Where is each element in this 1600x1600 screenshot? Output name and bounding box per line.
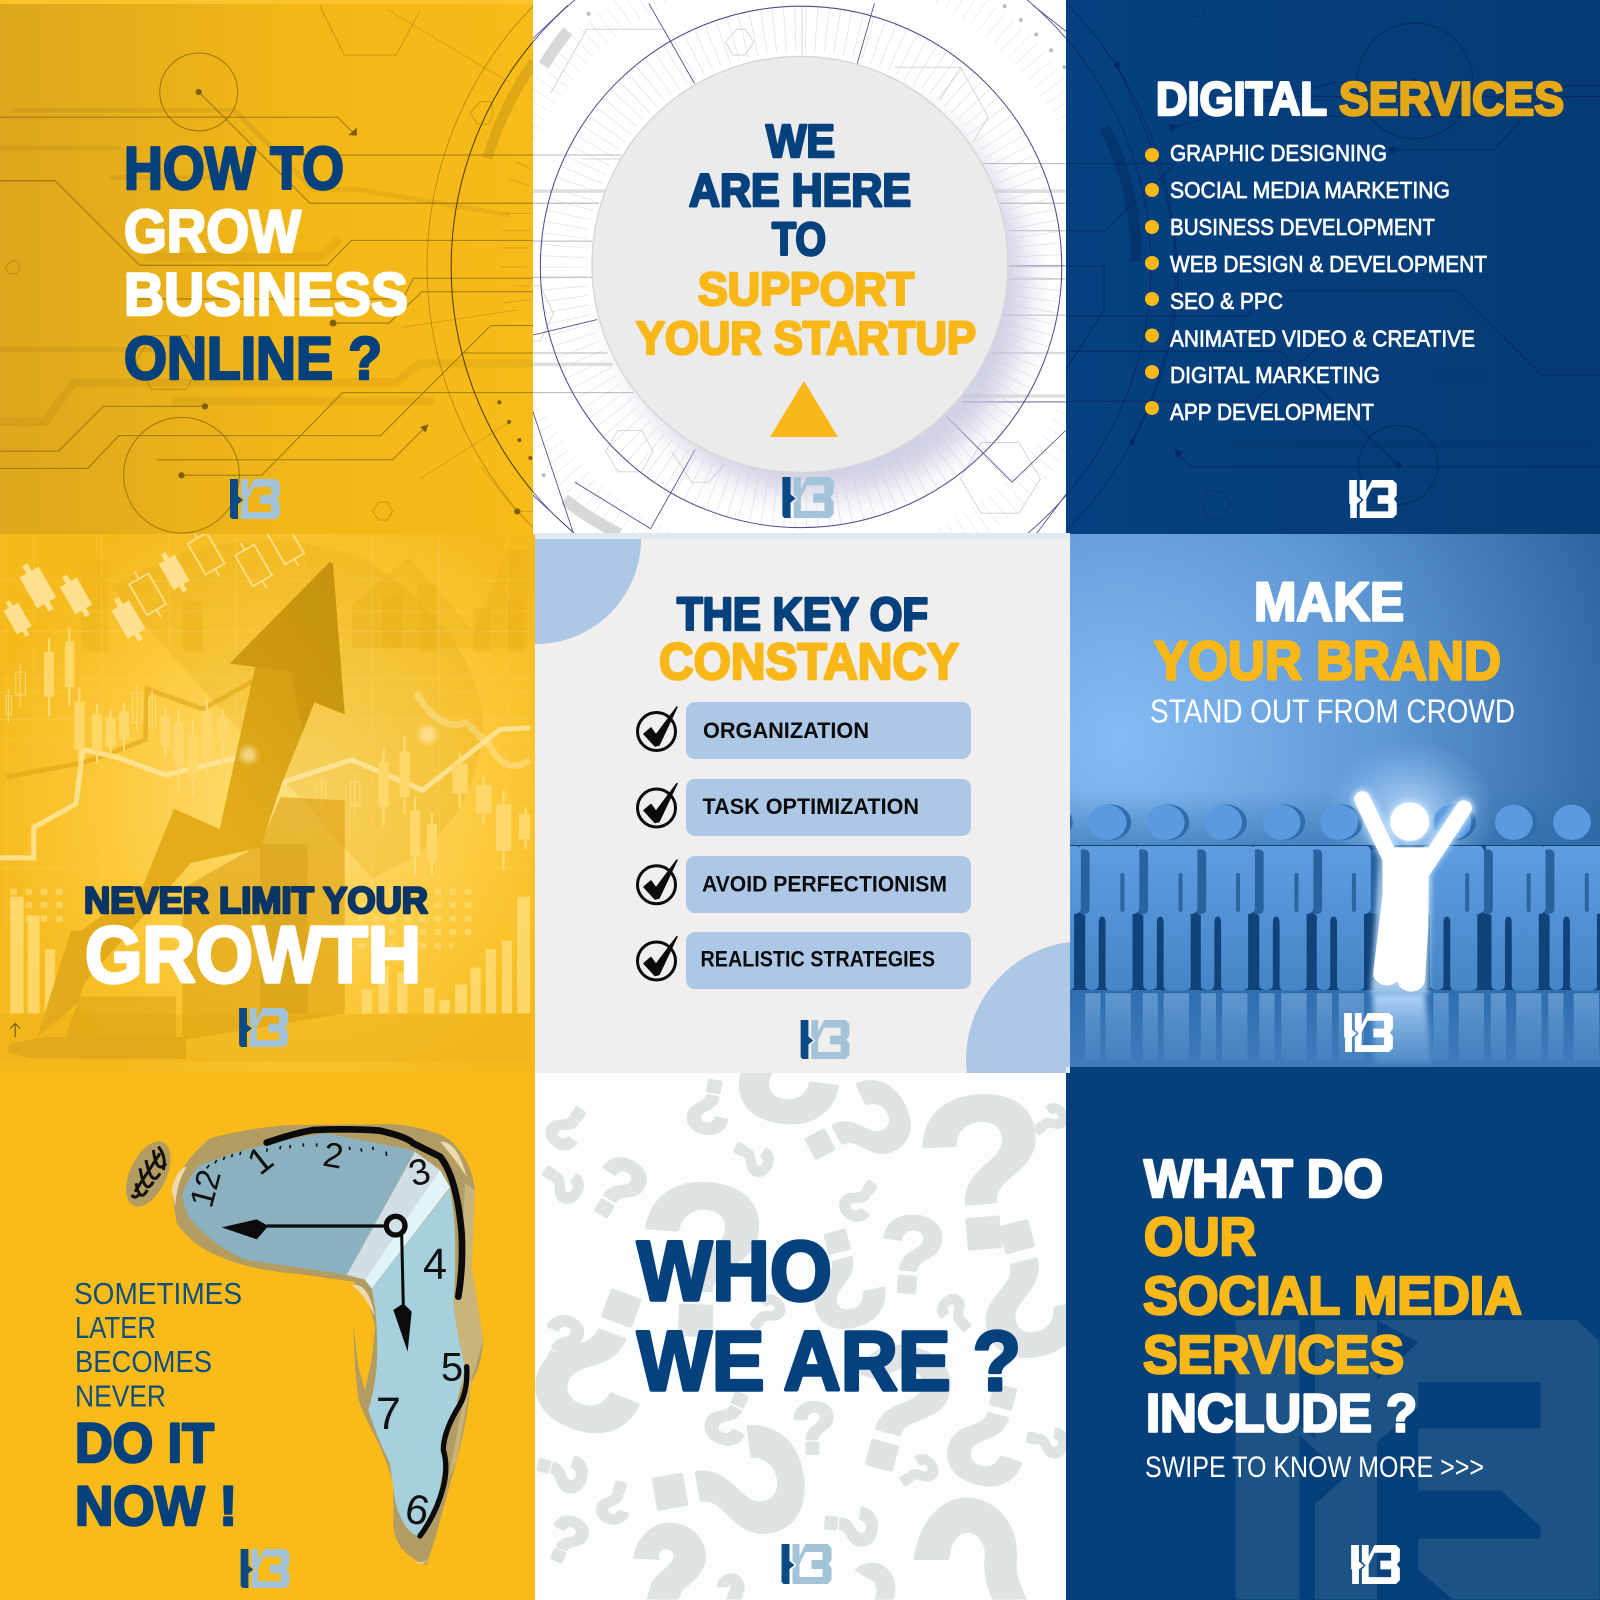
clock hands [222, 1216, 412, 1352]
checklist item: organization [638, 702, 971, 759]
clock numerals: 3 [404, 1150, 435, 1194]
heading: who we are: WHO [637, 1224, 832, 1318]
panel: what do our social media services include [1066, 1067, 1600, 1600]
heading: digital services: SERVICES [1339, 72, 1564, 125]
decoration: top-left quarter circle [535, 539, 641, 644]
bullet list: services: APP DEVELOPMENT [1170, 399, 1374, 425]
heading: we are here to support your startup: TO [772, 213, 826, 265]
watermark logo [1236, 1320, 1599, 1599]
panel: who we are: ? [590, 1466, 640, 1537]
heading: never limit your growth: NEVER LIMIT YOUR [84, 880, 428, 921]
panel: who we are: ? [525, 1150, 597, 1215]
panel: make your brand [1021, 534, 1600, 1067]
panel: the key of constancy [535, 533, 1070, 1073]
panel: who we are: ? [692, 1370, 768, 1465]
heading: what do our social media services include: OUR [1144, 1207, 1256, 1267]
panel: we are here to support your startup [533, 0, 1066, 533]
panel: who we are: ? [792, 1390, 836, 1469]
illustration: melting clock [117, 1124, 483, 1565]
panel: digital services [1066, 0, 1600, 534]
heading: we are here to support your startup: ARE HERE [689, 164, 911, 216]
panel: who we are: ? [821, 1301, 975, 1518]
logo [1351, 1545, 1400, 1584]
panel: who we are: ? [724, 945, 857, 1165]
clock numerals: 2 [320, 1135, 346, 1177]
bullet list: services: GRAPHIC DESIGNING [1170, 140, 1387, 166]
heading: the key of constancy [659, 588, 959, 690]
logo [1344, 1013, 1393, 1052]
logo [230, 479, 280, 519]
panel: never limit your growth [0, 515, 535, 1073]
text: sometimes later becomes never [74, 1276, 242, 1414]
heading: what do our social media services include [1143, 1149, 1522, 1444]
checklist item: realistic strategies [638, 932, 971, 989]
checklist item: avoid perfectionism [638, 856, 971, 913]
call to action: SWIPE TO KNOW MORE >>> [1145, 1451, 1484, 1484]
panel: who we are: ? [785, 1195, 904, 1362]
bullet list: services: SOCIAL MEDIA MARKETING [1170, 177, 1450, 203]
illustration: glowing white figure [1362, 799, 1464, 993]
heading: who we are [635, 1239, 1018, 1392]
panel: who we are: ? [1020, 1093, 1079, 1149]
icon: yellow triangle [770, 381, 838, 437]
decoration: bottom-right circle [966, 942, 1070, 1073]
text: sometimes later becomes never: BECOMES [75, 1344, 212, 1379]
clock numerals: 1 [240, 1138, 281, 1183]
bullet list: services: SEO & PPC [1170, 288, 1283, 314]
heading: make your brand [1154, 582, 1500, 682]
logo [782, 1544, 832, 1584]
bullet list: services [1145, 140, 1487, 425]
clock numerals: 5 [441, 1346, 463, 1390]
panel: who we are [535, 1073, 1066, 1600]
heading: we are here to support your startup: YOUR STARTUP [636, 312, 976, 364]
panel: who we are: ? [718, 1128, 787, 1187]
clock numerals: 7 [376, 1388, 401, 1439]
heading: what do our social media services include: SERVICES [1143, 1325, 1404, 1385]
panel: who we are: ? [534, 1499, 600, 1581]
heading: do it now: DO IT [75, 1411, 214, 1474]
subheading: STAND OUT FROM CROWD [1150, 694, 1515, 730]
panel: who we are: ? [827, 1163, 893, 1236]
panel: who we are: ? [533, 1089, 602, 1166]
panel: who we are: ? [765, 1050, 950, 1205]
heading: what do our social media services include: INCLUDE ? [1146, 1384, 1417, 1444]
heading: how to grow business online [124, 135, 408, 392]
clock face: lower part [368, 1188, 465, 1537]
heading: how to grow business online: ONLINE ? [124, 325, 382, 392]
bullet list: services: ANIMATED VIDEO & CREATIVE [1170, 326, 1475, 352]
heading: we are here to support your startup: WE [766, 115, 835, 167]
illustration: row of people [1021, 804, 1600, 1063]
panel: who we are: ? [926, 1282, 986, 1345]
panel: who we are: ? [928, 1346, 1052, 1522]
panel: who we are: ? [736, 1282, 797, 1345]
heading: we are here to support your startup [636, 115, 976, 364]
heading: digital services [1158, 80, 1564, 117]
heading: how to grow business online: HOW TO [124, 135, 344, 202]
heading: the key of constancy: CONSTANCY [659, 633, 959, 690]
text: sometimes later becomes never: SOMETIMES [74, 1276, 242, 1311]
logo [782, 477, 834, 518]
clock stem [117, 1135, 180, 1213]
checklist item: realistic strategies: REALISTIC STRATEGIES [700, 946, 935, 972]
panel: sometimes later becomes never [0, 1073, 535, 1600]
heading: digital services: DIGITAL [1156, 72, 1327, 125]
heading: how to grow business online: GROW [124, 198, 301, 265]
text: sometimes later becomes never: NEVER [75, 1378, 166, 1414]
clock numerals: 4 [423, 1241, 447, 1289]
glass highlight bands [347, 1152, 450, 1288]
panel: who we are: ? [680, 1062, 739, 1151]
logo [241, 1549, 289, 1588]
logo [1349, 480, 1397, 518]
logo [239, 1008, 288, 1047]
heading: do it now [75, 1411, 237, 1537]
bullet list: services: WEB DESIGN & DEVELOPMENT [1170, 251, 1487, 277]
heading: make your brand: YOUR BRAND [1154, 630, 1501, 692]
panel: who we are: ? [529, 1299, 594, 1384]
heading: never limit your growth: GROWTH [85, 910, 421, 999]
bullet list: services: BUSINESS DEVELOPMENT [1170, 214, 1435, 240]
checklist item: task optimization [638, 779, 971, 836]
heading: make your brand: MAKE [1254, 570, 1404, 632]
panel: who we are: ? [907, 1046, 1059, 1298]
checklist item: organization: ORGANIZATION [703, 718, 869, 743]
heading: never limit your growth [85, 886, 428, 985]
panel: who we are: ? [602, 1403, 854, 1569]
panel: how to grow business online [0, 0, 533, 534]
logo [801, 1020, 849, 1059]
panel: who we are: ? [501, 1232, 695, 1488]
panel: who we are: ? [874, 1191, 950, 1318]
panel: who we are: ? [519, 1442, 603, 1502]
panel: who we are: ? [1014, 1420, 1079, 1463]
heading: we are here to support your startup: SUPPORT [698, 263, 914, 315]
heading: what do our social media services include: SOCIAL MEDIA [1143, 1266, 1522, 1326]
checklist item: avoid perfectionism: AVOID PERFECTIONISM [702, 872, 947, 896]
heading: how to grow business online: BUSINESS [124, 261, 408, 328]
heading: do it now: NOW ! [75, 1474, 237, 1537]
clock face: shaded part [182, 1133, 415, 1275]
heading: what do our social media services include: WHAT DO [1144, 1149, 1383, 1209]
clock numerals: 6 [401, 1484, 434, 1535]
clock numerals [183, 1135, 463, 1535]
panel: who we are: ? [943, 1171, 1110, 1405]
checklist item: task optimization: TASK OPTIMIZATION [702, 794, 919, 819]
heading: the key of constancy: THE KEY OF [677, 588, 928, 640]
large grey circle [592, 56, 1008, 472]
clock numerals: 12 [183, 1166, 229, 1211]
heading: who we are: WE ARE ? [637, 1314, 1021, 1408]
bullet list: services: DIGITAL MARKETING [1170, 362, 1380, 388]
text: sometimes later becomes never: LATER [75, 1310, 156, 1345]
panel: who we are: ? [572, 1135, 663, 1242]
panel: who we are: ? [886, 1443, 951, 1501]
panel: who we are: ? [809, 1501, 891, 1551]
clock body [172, 1124, 483, 1565]
panel: who we are: ? [632, 1137, 773, 1383]
